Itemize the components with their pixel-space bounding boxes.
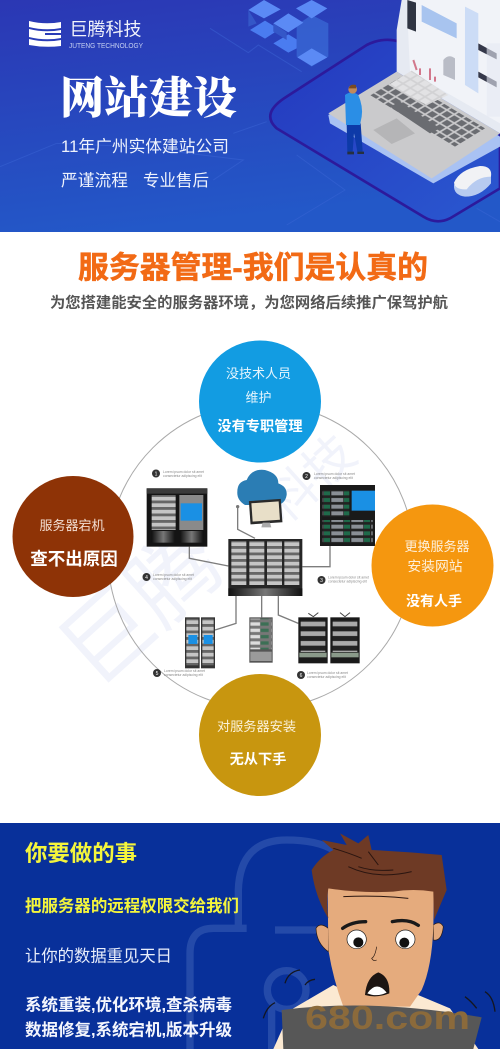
numbered note 3: consectetur adipiscing elit bbox=[328, 580, 367, 584]
icon: cloud and monitor bbox=[236, 470, 287, 527]
eyes bbox=[347, 930, 366, 949]
numbered note 5: Lorem ipsum dolor sit amet bbox=[164, 669, 205, 673]
section subheading: 为您搭建能安全的服务器环境，为您网络后续推广保驾护航 bbox=[50, 294, 448, 312]
banner tagline left: 严谨流程 bbox=[61, 171, 128, 190]
icon: standing person bbox=[345, 85, 364, 154]
banner subtitle: 11年广州实体建站公司 bbox=[61, 137, 229, 156]
circle: replace server: 没有人手 bbox=[406, 593, 462, 609]
highlighted text: remote access: 把服务器的远程权限交给我们 bbox=[25, 896, 239, 916]
server rack 1 bbox=[147, 488, 207, 547]
numbered note 6: consectetur adipiscing elit bbox=[307, 675, 346, 679]
numbered note 1 bbox=[152, 470, 204, 478]
circle: server down: 服务器宕机 bbox=[39, 518, 105, 533]
circle: replace server: 安装网站 bbox=[407, 559, 463, 574]
watermark bbox=[41, 425, 367, 705]
circle: replace server bbox=[372, 504, 494, 626]
logo bbox=[29, 20, 143, 50]
face bbox=[328, 888, 434, 1007]
numbered note 1: Lorem ipsum dolor sit amet bbox=[163, 470, 204, 474]
icon: logo waves bbox=[29, 21, 61, 47]
ears bbox=[316, 923, 443, 952]
icon: lock watermark bbox=[190, 840, 333, 1049]
watermark: 680.com: 680.com bbox=[305, 999, 470, 1036]
numbered note 3: Lorem ipsum dolor sit amet bbox=[328, 576, 369, 580]
watermark: 巨腾 bbox=[41, 510, 242, 705]
numbered note 3: 3 bbox=[320, 578, 323, 584]
company name: 巨腾科技 bbox=[70, 20, 142, 40]
shirt bbox=[273, 985, 478, 1049]
brows bbox=[343, 921, 418, 928]
server pair with antennas bbox=[298, 613, 360, 663]
mouth bbox=[365, 972, 389, 996]
numbered note 2: 2 bbox=[305, 474, 308, 480]
circle: no technical staff bbox=[199, 340, 321, 462]
circle: server installation: 对服务器安装 bbox=[217, 719, 296, 734]
section heading: 服务器管理-我们是认真的 bbox=[78, 251, 428, 285]
circle: no technical staff: 没有专职管理 bbox=[217, 418, 303, 435]
connection lines bbox=[189, 507, 330, 630]
illustration: shocked man at laptop bbox=[263, 833, 495, 1049]
circle: no technical staff: 维护 bbox=[245, 390, 272, 405]
numbered note 1: 1 bbox=[155, 472, 158, 478]
company name english: JUTENG TECHNOLOGY bbox=[69, 43, 143, 50]
banner title: 网站建设 bbox=[60, 74, 237, 123]
circle: server installation bbox=[199, 674, 321, 796]
numbered note 6 bbox=[297, 671, 348, 679]
heading: what you need to do: 你要做的事 bbox=[25, 841, 137, 866]
server tower middle bbox=[249, 617, 273, 663]
server rack 2 bbox=[320, 485, 375, 546]
server tower pair bbox=[185, 617, 215, 668]
orbit ring bbox=[108, 403, 414, 709]
panel: what you need to do bbox=[0, 823, 500, 1049]
icon: computer mouse bbox=[454, 166, 491, 197]
banner: website construction bbox=[0, 0, 500, 232]
text: services line 1: 系统重装,优化环境,查杀病毒 bbox=[25, 994, 232, 1014]
numbered note 2: Lorem ipsum dolor sit amet bbox=[314, 472, 355, 476]
numbered note 6: Lorem ipsum dolor sit amet bbox=[307, 671, 348, 675]
numbered note 2 bbox=[302, 472, 355, 480]
icon: floating cubes bbox=[248, 0, 328, 67]
server network diagram bbox=[147, 470, 375, 668]
nose bbox=[372, 947, 377, 961]
banner tagline right: 专业售后 bbox=[143, 171, 209, 190]
hair bbox=[312, 833, 447, 920]
numbered note 4: 4 bbox=[145, 575, 148, 581]
numbered note 6: 6 bbox=[300, 673, 303, 679]
central server bbox=[228, 539, 302, 596]
text: services line 2: 数据修复,系统宕机,版本升级 bbox=[25, 1020, 232, 1040]
shake marks bbox=[263, 970, 495, 1018]
numbered note 4: consectetur adipiscing elit bbox=[153, 577, 192, 581]
numbered note 4 bbox=[142, 573, 194, 581]
numbered note 3 bbox=[318, 576, 369, 584]
numbered note 5: 5 bbox=[156, 671, 159, 677]
circle: server installation: 无从下手 bbox=[230, 751, 286, 768]
icon: laptop on platform bbox=[270, 0, 500, 221]
numbered note 5 bbox=[153, 669, 205, 677]
numbered note 5: consectetur adipiscing elit bbox=[164, 673, 203, 677]
watermark: 科技 bbox=[255, 425, 367, 533]
numbered note 1: consectetur adipiscing elit bbox=[163, 474, 202, 478]
circle: server down bbox=[12, 476, 134, 597]
laptop back bbox=[282, 1006, 482, 1049]
circle: replace server: 更换服务器 bbox=[404, 539, 470, 554]
numbered note 2: consectetur adipiscing elit bbox=[314, 476, 353, 480]
circle: server down: 查不出原因 bbox=[30, 549, 118, 569]
text: recover data: 让你的数据重见天日 bbox=[25, 948, 172, 966]
circle: no technical staff: 没技术人员 bbox=[226, 366, 291, 381]
numbered note 4: Lorem ipsum dolor sit amet bbox=[153, 573, 194, 577]
